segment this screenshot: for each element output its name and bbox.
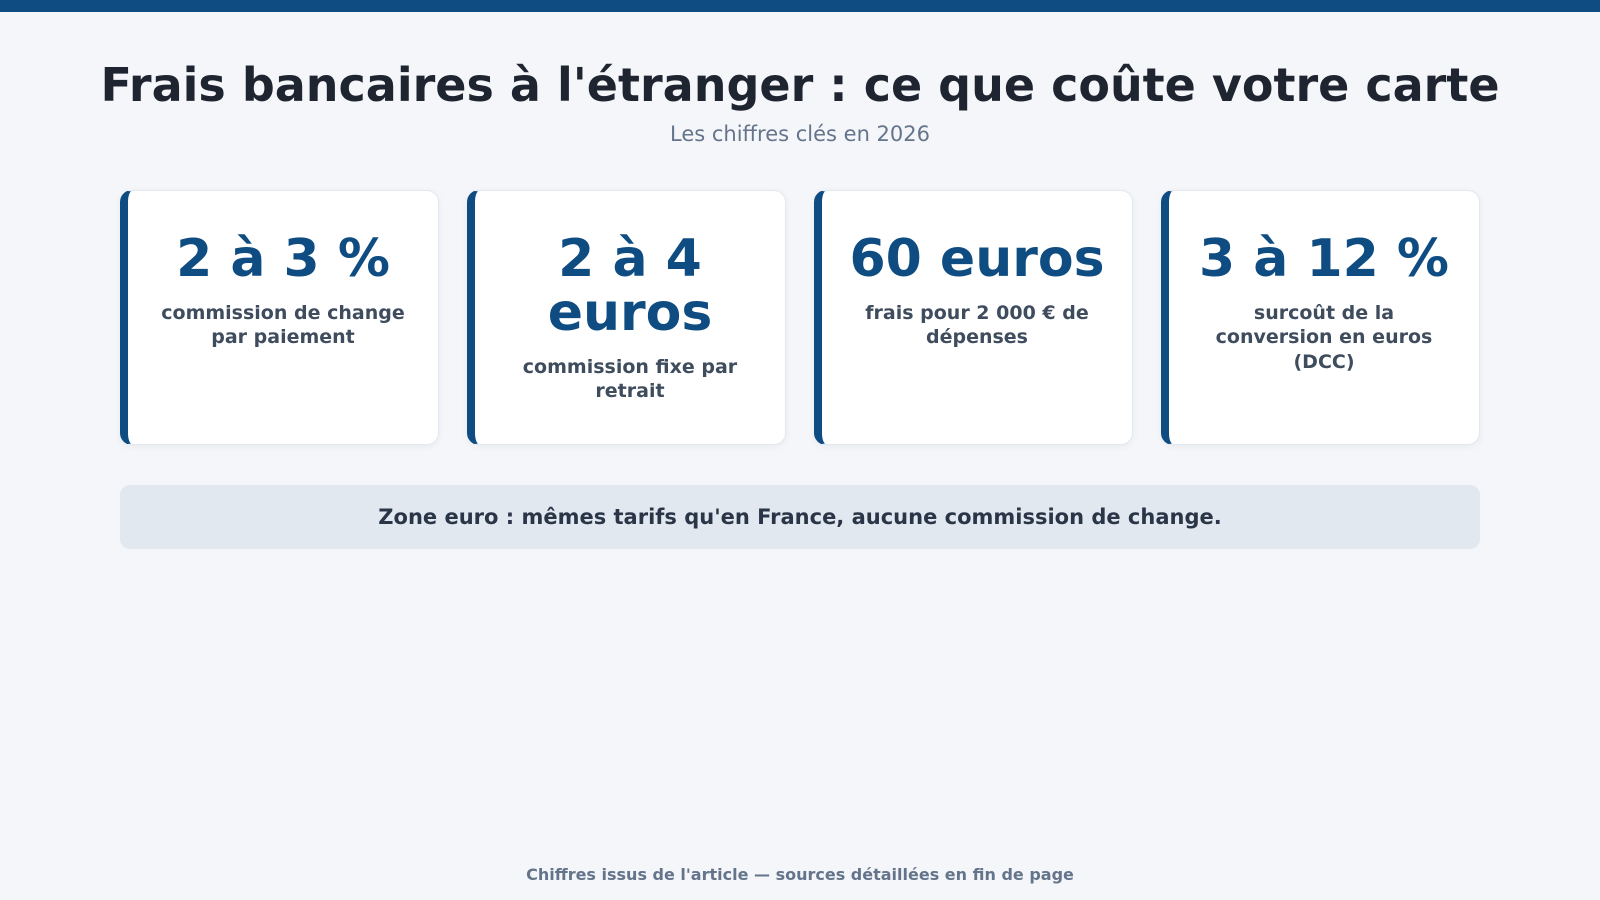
- figure: 2 à 4 euros: 2 à 4 euros: [548, 229, 712, 343]
- label: surcoût: surcoût de la conversion en euros (DCC): [1216, 302, 1432, 373]
- label: frais: frais pour 2 000 € de dépenses: [865, 302, 1089, 348]
- panel: card frais pour 2 000 €: [814, 190, 1133, 445]
- footer note: Chiffres issus de l'article — sources détaillées en fin de page: [526, 865, 1074, 884]
- label: commission fixe: commission fixe par retrait: [523, 356, 737, 402]
- figure: 2 à 3 %: 2 à 3 %: [176, 229, 390, 289]
- subtitle: Les chiffres clés en 2026: [670, 122, 930, 146]
- panel: card commission de change: [120, 190, 439, 445]
- panel: card commission fixe: [467, 190, 786, 445]
- label: commission de change: commission de change par paiement: [161, 302, 405, 348]
- title: Frais bancaires à l'étranger : ce que coûte votre carte: [100, 58, 1500, 112]
- top bar: [0, 0, 1600, 12]
- callout: zone euro: Zone euro : mêmes tarifs qu'en France, aucune commission de change.: [378, 505, 1222, 529]
- callout: zone euro: [120, 485, 1480, 549]
- panel: card surcoût DCC: [1161, 190, 1480, 445]
- figure: 60 euros: 60 euros: [849, 229, 1105, 289]
- figure: 3 à 12 %: 3 à 12 %: [1199, 229, 1449, 289]
